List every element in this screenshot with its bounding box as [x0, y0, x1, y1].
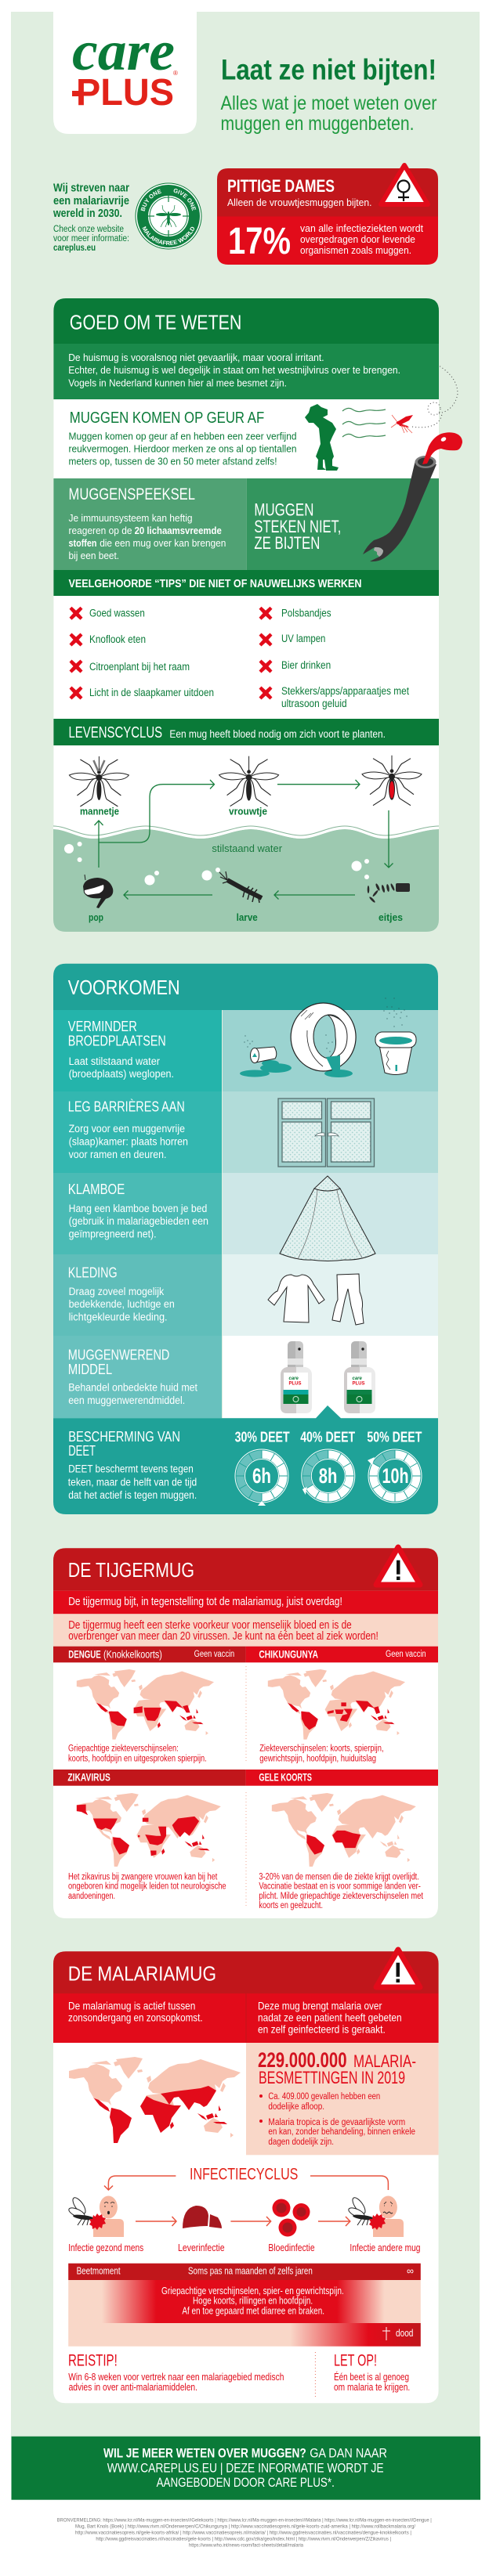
text block: muggen steken niet: STEKEN NIET, [254, 517, 341, 536]
map: chikungunya [268, 1669, 405, 1740]
icon: repellent bottle green: PLUS [353, 1381, 365, 1386]
icon: cracked flower pot [375, 1032, 416, 1074]
arrows: lifecycle [94, 780, 393, 899]
text: gele koorts: koorts en geelzucht. [259, 1901, 323, 1910]
text block: muggenspeeksel: MUGGENSPEEKSEL [69, 485, 195, 503]
text: malaria-free statement: careplus.eu [53, 244, 96, 253]
map: malaria [69, 2057, 241, 2143]
row: broedplaatsen: BROEDPLAATSEN [68, 1034, 166, 1049]
logo card: care [72, 20, 175, 82]
icon: mosquito net [280, 1176, 375, 1261]
text block: muggenspeeksel: Je immuunsysteem kan heftig [69, 512, 193, 524]
logo card [53, 12, 197, 134]
flight path [412, 366, 458, 428]
callout: let op [334, 2352, 410, 2393]
icon: malariafree world badge: GIVE ONE [174, 189, 196, 211]
icon: warning triangle [376, 1547, 420, 1585]
panel: pittige dames: Alleen de vrouwtjesmuggen bijten. [227, 197, 371, 208]
icon: window with screens [278, 1099, 375, 1167]
text block: intro: Vogels in Nederland kunnen hier al mee besmet zijn. [68, 377, 287, 389]
text: zika: Het zikavirus bij zwangere vrouwen kan bij het [68, 1873, 218, 1882]
icon: man silhouette [305, 404, 339, 471]
text: gele koorts: plicht. Milde griepachtige ziekteverschijnselen met [259, 1892, 424, 1901]
footer banner: WIL JE MEER WETEN OVER MUGGEN? [103, 2446, 306, 2461]
icon: blood cells [273, 2199, 310, 2236]
list: tips: ultrasoon geluid [281, 698, 347, 709]
text: malaria-free statement: voor meer informatie: [53, 234, 129, 244]
row: muggenwerend middel: MUGGENWEREND [68, 1348, 169, 1363]
stat: malaria infections: MALARIA- [353, 2051, 416, 2071]
mosquito swarm dots [244, 998, 408, 1052]
text: chikungunya symptoms: Ziekteverschijnselen: koorts, spierpijn, [259, 1744, 384, 1754]
chart: symptom timeline: Af en toe gepaard met diarree en braken. [182, 2306, 324, 2317]
callout: let op: Één beet is al genoeg [334, 2371, 409, 2383]
arrows: cycle return [104, 2176, 388, 2190]
text block: muggen steken niet [254, 500, 341, 553]
list: tips: Licht in de slaapkamer uitdoen [89, 687, 214, 698]
logo card: ® [173, 70, 178, 77]
list: tips: Bier drinken [281, 659, 331, 671]
icon: female mosquito [219, 756, 279, 806]
row: barrieres: LEG BARRIÈRES AAN [68, 1099, 185, 1114]
bubbles [64, 842, 369, 885]
deet panel: 30% DEET [235, 1430, 290, 1445]
icon: warning triangle [376, 1950, 420, 1987]
chart: 8h protection dial: 8h [319, 1464, 337, 1488]
panel: pittige dames: van alle infectieziekten wordt [300, 222, 423, 234]
map: zika [77, 1793, 221, 1867]
list: malaria facts: Ca. 409.000 gevallen hebben een [268, 2092, 380, 2102]
text block: sources: http://www.vaccinatiesopreis.nl/gele-koorts-afrika/ | http://www.vaccinatiesopreis.nl/malaria/ | http://www.ggdreisvaccinaties.nl/vaccinaties/dengue-knokkelkoorts | [75, 2531, 411, 2536]
chart: symptom timeline: Hoge koorts, rillingen en hoofdpijn. [193, 2296, 313, 2307]
row: broedplaatsen: Laat stilstaand water [69, 1055, 160, 1067]
callout: reistip: advies in over anti-malariamiddelen. [69, 2382, 197, 2393]
icon: pupa [83, 875, 113, 908]
text block: geur: reukvermogen. Hierdoor merken ze ons al op tientallen [69, 442, 296, 454]
panel: pittige dames: PITTIGE DAMES [227, 176, 335, 196]
stat: malaria infections: 229.000.000 [258, 2048, 347, 2072]
icon: fed female mosquito [362, 756, 422, 806]
icon: mosquito proboscis with blood [363, 432, 462, 561]
text: transmission [258, 2000, 402, 2036]
icon: eggs [368, 883, 410, 904]
text block: intro [68, 352, 400, 389]
heading: VOORKOMEN [68, 976, 180, 999]
text block: sources: https://www.who.int/news-room/fact-sheets/detail/malaria [189, 2543, 303, 2549]
panel: de tijgermug: De tijgermug bijt, in tegenstelling tot de malariamug, juist overdag! [68, 1596, 342, 1608]
text: zika: ongeboren kind mogelijk leiden tot neurologische [68, 1882, 226, 1892]
text: zika: aandoeningen. [68, 1892, 115, 1901]
text: transmission: nadat ze een patient heeft gebeten [258, 2011, 402, 2024]
text: zika [68, 1873, 226, 1901]
labels: infection cycle: Infectie gezond mens [68, 2242, 144, 2253]
labels: adults [80, 805, 267, 817]
panel: pittige dames: overgedragen door levende [300, 233, 415, 245]
panel: de tijgermug: overbrenger van meer dan 20 virussen. Je kunt na één beet al ziek worden! [68, 1630, 379, 1643]
row: broedplaatsen: (broedplaats) weglopen. [69, 1068, 174, 1080]
text block: geur [69, 409, 296, 467]
row: barrieres: voor ramen en deuren. [69, 1149, 166, 1160]
logo card: PLUS [76, 72, 174, 114]
icon: tire [291, 1003, 356, 1071]
icon: warning triangle with female symbol [381, 165, 428, 204]
panel: de tijgermug: De tijgermug heeft een sterke voorkeur voor menselijk bloed en is de [68, 1619, 352, 1632]
row: kleding: lichtgekleurde kleding. [69, 1311, 168, 1323]
labels: adults: mannetje [80, 805, 119, 817]
panel: tips die niet werken: VEELGEHOORDE “TIPS” DIE NIET OF NAUWELIJKS WERKEN [69, 577, 362, 590]
text block: intro: Echter, de huismug is wel degelijk in staat om het westnijlvirus over te brengen. [68, 364, 400, 376]
list: malaria facts [259, 2092, 415, 2147]
labels: infection cycle [68, 2242, 420, 2253]
row: barrieres: Zorg voor een muggenvrije [69, 1123, 185, 1135]
row: kleding: KLEDING [68, 1265, 118, 1281]
labels: aquatic stages: larve [237, 911, 258, 923]
panel: de tijgermug [53, 1547, 438, 1918]
footer banner: AANGEBODEN DOOR CARE PLUS*. [157, 2475, 335, 2490]
text: transmission: en zelf geinfecteerd is geraakt. [258, 2023, 386, 2036]
icon: bite sick person [347, 2195, 404, 2237]
panel: pittige dames [217, 165, 438, 265]
row: barrieres [68, 1099, 188, 1160]
chart: symptom timeline: Griepachtige verschijnselen, spier- en gewrichtspijn. [161, 2286, 344, 2296]
callout: let op: om malaria te krijgen. [334, 2382, 410, 2393]
text block: sources: Mug, Bart Knols (Boek) | http://www.rivm.nl/Onderwerpen/C/Chikungunya | http://www.vaccinatiesopreis.nl/gele-koorts-zuid-amerika | http://www.rollbackmalaria.org/ [75, 2524, 415, 2530]
disease bars: CHIKUNGUNYA [259, 1649, 318, 1661]
text: chikungunya symptoms: gewrichtspijn, hoofdpijn, huiduitslag [259, 1755, 376, 1764]
title: Laat ze niet bijten! [221, 53, 436, 86]
footer banner: GA DAN NAAR [310, 2446, 387, 2461]
row: broedplaatsen [68, 1019, 174, 1080]
labels: aquatic stages: eitjes [379, 911, 403, 923]
text: gele koorts: 3-20% van de mensen die de ziekte krijgt overlijdt. [259, 1873, 419, 1882]
list: tips: Stekkers/apps/apparaatjes met [281, 685, 409, 697]
icon: trousers [332, 1274, 364, 1325]
list: tips: Knoflook eten [89, 633, 146, 645]
text: malaria-free statement: Wij streven naar [53, 182, 129, 194]
list: malaria facts: en kan, zonder behandeling, binnen enkele [268, 2127, 415, 2137]
icon: repellent bottle green: care [353, 1376, 363, 1381]
row: kleding [68, 1265, 175, 1323]
text: gele koorts [259, 1873, 424, 1910]
icon: red mosquito [391, 415, 413, 433]
text: dengue symptoms [68, 1744, 207, 1764]
callout: let op: LET OP! [334, 2352, 377, 2370]
arrow [230, 2217, 271, 2226]
list: tips: Goed wassen [89, 608, 145, 619]
deet panel: DEET [68, 1443, 96, 1459]
list: malaria facts: Malaria tropica is de gevaarlijkste vorm [268, 2118, 405, 2127]
labels: infection cycle: Leverinfectie [178, 2242, 225, 2253]
labels: infection cycle: Infectie andere mug [350, 2242, 420, 2253]
title: Alles wat je moet weten over [221, 92, 437, 114]
text block: intro: De huismug is vooralsnog niet gevaarlijk, maar vooral irritant. [68, 352, 324, 363]
row: muggenwerend middel: Behandel onbedekte huid met [68, 1382, 197, 1394]
callout: reistip: Win 6-8 weken voor vertrek naar een malariagebied medisch [68, 2372, 284, 2383]
chart: symptom timeline [68, 2264, 421, 2347]
icon: repellent bottle teal [281, 1341, 312, 1413]
disease bars: (Knokkelkoorts) [103, 1649, 162, 1661]
text block: sources [57, 2518, 432, 2549]
text block: muggenspeeksel: 20 lichaamsvreemde [135, 525, 222, 536]
deet panel: BESCHERMING VAN [68, 1429, 180, 1445]
text: malaria-free statement: wereld in 2030. [53, 207, 122, 220]
text: gele koorts: Vaccinatie bestaat en is voor sommige landen ver- [259, 1882, 421, 1892]
list: malaria facts: dagen dodelijk zijn. [268, 2138, 334, 2147]
row: klamboe: Hang een klamboe boven je bed [69, 1203, 207, 1214]
text block: sources: http://www.ggdreisvaccinaties.nl/vaccinaties/gele-koorts | http://www.cdc.gov/zika/geo/index.html | http://www.rivm.nl/Onderwerpen/Z/Zikavirus | [96, 2537, 391, 2542]
title [221, 53, 437, 135]
disease bars: Geen vaccin [194, 1650, 234, 1659]
heading: infectiecyclus: INFECTIECYCLUS [190, 2165, 298, 2183]
disease bars: DENGUE [68, 1649, 101, 1661]
list: tips: UV lampen [281, 633, 325, 644]
deet panel: dat het actief is tegen muggen. [68, 1489, 197, 1501]
row: klamboe: KLAMBOE [68, 1182, 125, 1197]
row: muggenwerend middel: MIDDEL [68, 1362, 112, 1377]
text: activity [68, 2000, 203, 2024]
panel: pittige dames: organismen zoals muggen. [300, 244, 411, 256]
text block: muggen steken niet: MUGGEN [254, 500, 313, 520]
row: broedplaatsen: VERMINDER [68, 1019, 137, 1034]
icon: larva [219, 871, 262, 903]
heading: DE MALARIAMUG [68, 1961, 216, 1985]
chart: symptom timeline: Beetmoment [77, 2266, 121, 2277]
chart: symptom timeline: ∞ [407, 2266, 414, 2277]
text block: muggenspeeksel: bij een beet. [69, 550, 119, 561]
icons: red crosses [69, 607, 273, 700]
chart: 10h protection dial: 10h [382, 1464, 409, 1488]
heading: GOED OM TE WETEN [70, 310, 241, 334]
callout: reistip: REISTIP! [68, 2352, 118, 2370]
row: muggenwerend middel: een muggenwerendmiddel. [68, 1394, 185, 1406]
text block: muggenspeeksel: reageren op de [69, 525, 132, 536]
chart: 6h protection dial [235, 1449, 288, 1506]
icon: liver [183, 2206, 222, 2228]
arrow [136, 2217, 176, 2226]
icon: male mosquito [69, 756, 129, 806]
panel: voorkomen [53, 964, 438, 1514]
list: tips: Citroenplant bij het raam [89, 661, 190, 673]
panel: levenscyclus [53, 719, 439, 932]
text: malaria-free statement: een malariavrije [53, 195, 129, 207]
row: kleding: Draag zoveel mogelijk [69, 1286, 164, 1297]
panel: levenscyclus: LEVENSCYCLUS [69, 724, 162, 741]
text: transmission: Deze mug brengt malaria over [258, 2000, 382, 2012]
text block: sources: BRONVERMELDING: https://www.lcr.nl/Ma-muggen-en-insecten/#Gelekoorts | https://www.lcr.nl/Ma-muggen-en-insecten/#Malaria | https://www.lcr.nl/Ma-muggen-en-insecten/#Dengue | [57, 2518, 432, 2524]
text: dengue symptoms: koorts, hoofdpijn en uitgesproken spierpijn. [68, 1755, 207, 1764]
text block: muggenspeeksel: stoffen [69, 537, 97, 549]
chart: 10h protection dial [368, 1449, 422, 1503]
label: stilstaand water: stilstaand water [212, 842, 283, 854]
panel: tips die niet werken [53, 570, 439, 719]
icon: scent waves [342, 408, 386, 438]
text block: muggenspeeksel: die een mug over kan brengen [100, 537, 226, 549]
icon: repellent bottle teal: PLUS [288, 1381, 302, 1386]
deet panel: DEET beschermt tevens tegen [68, 1463, 194, 1475]
disease bars [53, 1647, 438, 1786]
callout: reistip [68, 2352, 284, 2393]
row: klamboe: geïmpregneerd net). [69, 1228, 157, 1240]
chart: symptom timeline: Soms pas na maanden of zelfs jaren [188, 2266, 313, 2277]
text: dengue symptoms: Griepachtige ziekteverschijnselen: [68, 1744, 179, 1754]
text: malaria-free statement [53, 182, 129, 253]
icon: repellent bottle green [344, 1341, 375, 1413]
chart: 8h protection dial [302, 1449, 355, 1503]
row: klamboe [68, 1182, 208, 1240]
footer banner: WWW.CAREPLUS.EU | DEZE INFORMATIE WORDT JE [107, 2461, 384, 2476]
deet panel [53, 1405, 438, 1514]
icon: malariafree world badge: MALARIAFREE WORLD [142, 226, 194, 246]
title: muggen en muggenbeten. [221, 113, 414, 135]
map: gele koorts [272, 1793, 416, 1867]
labels: adults: vrouwtje [229, 805, 267, 817]
panel: levenscyclus: Een mug heeft bloed nodig om zich voort te planten. [169, 728, 386, 740]
icon: repellent bottle teal: care [288, 1376, 299, 1381]
text block: geur: meters op, tussen de 30 en 50 meter afstand zelfs! [69, 456, 277, 467]
icon: bite healthy person [67, 2195, 124, 2237]
panel: goed om te weten [53, 298, 458, 570]
deet panel: 40% DEET [300, 1430, 355, 1445]
heading: DE TIJGERMUG [68, 1558, 194, 1582]
icon: malariafree world badge: BUY ONE [141, 189, 161, 211]
labels: aquatic stages: pop [89, 911, 103, 923]
text: activity: zonsondergang en zonsopkomst. [68, 2011, 203, 2024]
panel: pittige dames: 17% [228, 221, 291, 262]
panel: de malariamug [53, 1950, 439, 2403]
labels: infection cycle: Bloedinfectie [268, 2242, 315, 2253]
text: malaria-free statement: Check onze website [53, 225, 124, 234]
labels: aquatic stages [89, 911, 403, 923]
stat: malaria infections [258, 2048, 416, 2087]
chart: symptom timeline: dood [396, 2328, 413, 2339]
map: dengue [77, 1669, 214, 1740]
footer banner [11, 2437, 480, 2500]
row: barrieres: (slaap)kamer: plaats horren [69, 1136, 188, 1148]
disease bars: ZIKAVIRUS [67, 1771, 110, 1783]
text: chikungunya symptoms [259, 1744, 384, 1764]
text block: geur: Muggen komen op geur af en hebben een zeer verfijnd [69, 431, 296, 442]
text: activity: De malariamug is actief tussen [68, 2000, 195, 2012]
deet panel: 50% DEET [367, 1430, 422, 1445]
row: kleding: bedekkende, luchtige en [69, 1298, 175, 1310]
icon: malariafree world badge [135, 183, 202, 249]
list: tips: Polsbandjes [281, 608, 331, 619]
chart: 6h protection dial: 6h [252, 1464, 271, 1488]
text block: muggenspeeksel [69, 485, 226, 561]
water [53, 826, 439, 932]
deet panel: teken, maar de helft van de tijd [68, 1477, 197, 1488]
arrow [318, 2217, 350, 2226]
text block: geur: MUGGEN KOMEN OP GEUR AF [70, 409, 264, 427]
list: malaria facts: dodelijke afloop. [268, 2102, 324, 2112]
disease bars: Geen vaccin [386, 1650, 426, 1659]
list: tips [89, 608, 409, 709]
stat: malaria infections: BESMETTINGEN IN 2019 [259, 2068, 405, 2087]
icon: puddles [240, 1060, 353, 1077]
row: muggenwerend middel [68, 1348, 197, 1406]
icon: long sleeve shirt [268, 1275, 324, 1322]
icon: tipped cup [251, 1047, 277, 1063]
text block: muggen steken niet: ZE BIJTEN [254, 533, 320, 553]
disease bars: GELE KOORTS [259, 1771, 312, 1783]
row: klamboe: (gebruik in malariagebieden een [69, 1215, 208, 1227]
